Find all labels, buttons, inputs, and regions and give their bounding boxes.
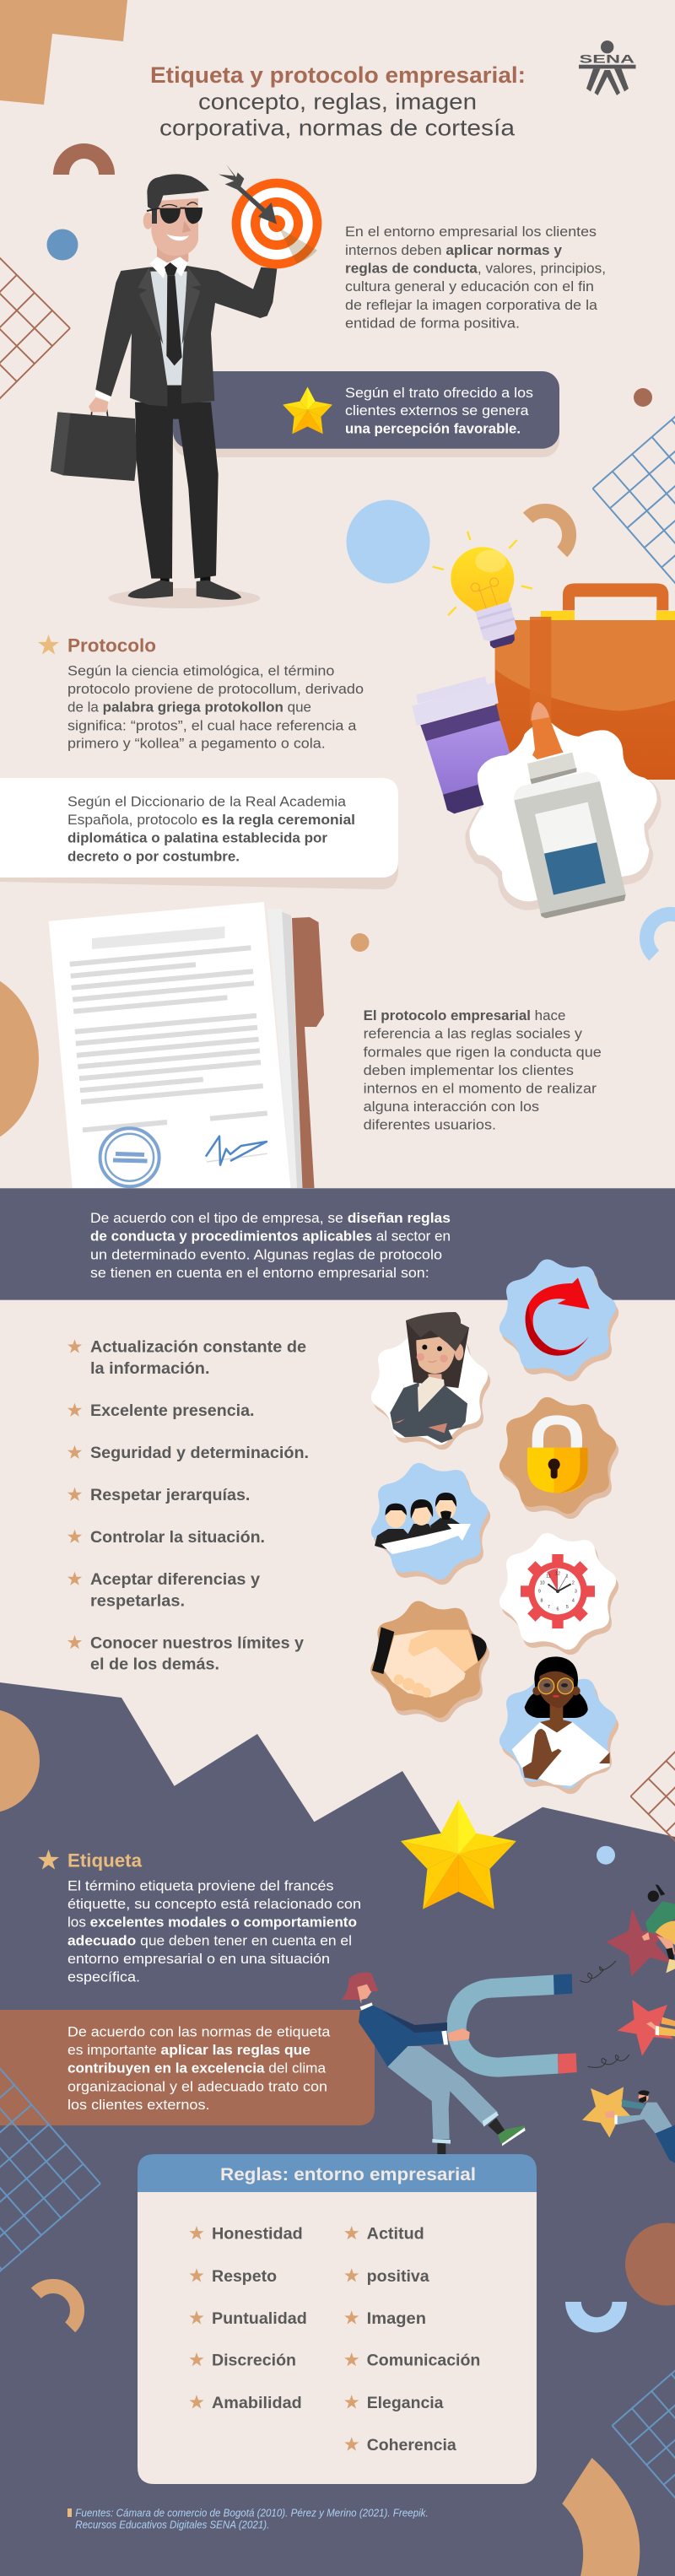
panel: dark band: se tienen en cuenta en el entorno empresarial son: xyxy=(90,1266,429,1281)
heading: Etiqueta xyxy=(38,1850,143,1871)
etiquette definition text: los excelentes modales o comportamiento xyxy=(68,1915,357,1931)
etiquette definition text: étiquette, su concepto está relacionado con xyxy=(68,1897,361,1912)
list of protocol rules: Aceptar diferencias y xyxy=(90,1570,260,1589)
icon: clock gear badge: 2 xyxy=(572,1581,575,1586)
decorative blue circle xyxy=(47,230,78,260)
title: concepto, reglas, imagen xyxy=(198,89,477,115)
icon: handshake badge xyxy=(359,1589,502,1735)
decorative tan circle xyxy=(0,1709,40,1813)
icon: clock gear badge: 12 xyxy=(555,1571,560,1576)
etiquette definition text: El término etiqueta proviene del francés xyxy=(68,1878,333,1893)
corporate protocol text: alguna interacción con los xyxy=(364,1099,539,1115)
panel: brown etiquette rules: De acuerdo con las normas de etiqueta xyxy=(68,2024,331,2039)
icon: clock gear badge: 11 xyxy=(546,1574,551,1579)
corporate protocol text: deben implementar los clientes xyxy=(364,1063,574,1078)
table body: Respeto xyxy=(212,2267,277,2286)
intro text: reglas de conducta , valores, principios, xyxy=(345,262,606,277)
intro text: cultura general y educación con el fin xyxy=(345,279,594,294)
corporate protocol text: referencia a las reglas sociales y xyxy=(364,1027,583,1042)
dark lower section background xyxy=(0,1682,675,2576)
panel: white RAE definition: diplomática o palatina establecida por xyxy=(68,831,328,846)
decorative tan arc lower left xyxy=(36,2286,78,2327)
illustration: businessman with target xyxy=(51,165,559,608)
decorative tan arc xyxy=(528,510,570,552)
icon: clock gear badge: 1 xyxy=(566,1574,569,1580)
icon: clock gear badge: 4 xyxy=(572,1599,575,1604)
intro text xyxy=(345,224,606,332)
sources footnote: Recursos Educativos Digitales SENA (2021). xyxy=(75,2519,269,2531)
illustration: light bulb, briefcase, cup and glue xyxy=(412,532,675,918)
icon: clock gear badge: 8 xyxy=(541,1599,543,1604)
decorative tan arc bottom right xyxy=(562,2458,640,2576)
decorative light blue dot xyxy=(597,1846,615,1865)
decorative brown grid right xyxy=(630,1690,675,1903)
panel: dark band xyxy=(0,1188,675,1300)
SENA logo: SENA xyxy=(579,53,634,66)
corporate protocol text: El protocolo empresarial hace xyxy=(364,1008,565,1023)
table body: Actitud xyxy=(367,2225,424,2244)
panel: white RAE definition: Española, protocolo es la regla ceremonial xyxy=(68,813,355,828)
list of protocol rules: Actualización constante de xyxy=(90,1338,306,1357)
panel: white RAE definition: Según el Diccionario de la Real Academia xyxy=(68,794,347,809)
heading: Protocolo: Protocolo xyxy=(68,635,156,656)
illustration: large gold star xyxy=(401,1800,516,1909)
table body: Puntualidad xyxy=(212,2309,307,2328)
protocol definition text: primero y “kollea” a pegamento o cola. xyxy=(68,737,326,752)
protocol definition text: de la palabra griega protokollon que xyxy=(68,700,311,716)
protocol definition text: protocolo proviene de protocollum, derivado xyxy=(68,682,364,697)
decorative light blue arc xyxy=(647,914,675,955)
icon: clock gear badge: 5 xyxy=(566,1605,569,1610)
illustration: signed document xyxy=(49,902,324,1188)
protocol definition text xyxy=(68,663,364,752)
icon: clock gear badge: 3 xyxy=(575,1590,577,1595)
SENA logo xyxy=(579,41,636,95)
sources footnote: Fuentes: Cámara de comercio de Bogotá (2010). Pérez y Merino (2021). Freepik. xyxy=(75,2507,429,2519)
intro text: internos deben aplicar normas y xyxy=(345,243,563,258)
decorative tan circle left xyxy=(0,970,39,1148)
decorative brown grid left xyxy=(0,222,70,435)
title xyxy=(150,62,526,141)
callout text: clientes externos se genera xyxy=(345,403,529,419)
table body: positiva xyxy=(367,2267,429,2286)
table body: Amabilidad xyxy=(212,2394,302,2412)
table header: Reglas: entorno empresarial xyxy=(220,2164,476,2184)
table body: Elegancia xyxy=(367,2394,444,2412)
title: Etiqueta y protocolo empresarial: xyxy=(150,62,526,88)
icon: clock gear badge: 10 xyxy=(540,1581,545,1586)
corporate protocol text: internos en el momento de realizar xyxy=(364,1082,597,1097)
list of protocol rules xyxy=(68,1338,309,1673)
panel: star callout behind figure xyxy=(173,371,559,457)
panel: white RAE definition xyxy=(0,778,398,889)
panel: dark band: de conducta y procedimientos aplicables al sector en xyxy=(90,1229,451,1245)
panel: rules table xyxy=(138,2154,537,2484)
intro text: En el entorno empresarial los clientes xyxy=(345,224,597,240)
decorative tan dot xyxy=(351,933,370,952)
panel: brown etiquette rules: organizacional y el adecuado trato con xyxy=(68,2079,327,2094)
protocol definition text: Según la ciencia etimológica, el término xyxy=(68,663,334,678)
decorative light blue circle xyxy=(346,500,430,584)
list of protocol rules: Seguridad y determinación. xyxy=(90,1444,309,1462)
list of protocol rules: respetarlas. xyxy=(90,1591,185,1610)
icon: padlock badge xyxy=(487,1385,631,1531)
icon: team badge xyxy=(359,1450,503,1597)
list of protocol rules: Respetar jerarquías. xyxy=(90,1486,250,1504)
icon: woman with glasses badge xyxy=(487,1656,631,1806)
table body: Comunicación xyxy=(367,2352,480,2370)
decorative brown circle right xyxy=(625,2222,675,2305)
corporate protocol text: formales que rigen la conducta que xyxy=(364,1045,602,1060)
table body xyxy=(138,2192,537,2484)
icon: clock gear badge: 6 xyxy=(557,1607,559,1612)
decorative brown dot xyxy=(634,388,652,407)
icon: clock gear badge xyxy=(487,1520,631,1667)
icon: clock gear badge: 7 xyxy=(548,1605,550,1610)
table body: Imagen xyxy=(367,2309,426,2328)
icon: gold star xyxy=(283,386,332,434)
etiquette definition text: entorno empresarial o en una situación xyxy=(68,1952,330,1967)
etiquette definition text: adecuado que deben tener en cuenta en el xyxy=(68,1933,352,1948)
panel: brown etiquette rules: los clientes externos. xyxy=(68,2098,210,2113)
etiquette definition text: específica. xyxy=(68,1970,140,1985)
panel: brown etiquette rules: es importante aplicar las reglas que xyxy=(68,2043,310,2058)
callout text xyxy=(345,386,533,437)
callout text: Según el trato ofrecido a los xyxy=(345,386,533,401)
panel: brown etiquette rules: contribuyen en la excelencia del clima xyxy=(68,2061,327,2076)
list of protocol rules: la información. xyxy=(90,1359,209,1378)
table body: Coherencia xyxy=(367,2436,456,2454)
list of protocol rules: el de los demás. xyxy=(90,1655,219,1673)
list of protocol rules: Controlar la situación. xyxy=(90,1528,265,1547)
panel: dark band: un determinado evento. Algunas reglas de protocolo xyxy=(90,1247,442,1262)
decorative blue grid right xyxy=(592,386,675,607)
heading: Etiqueta: Etiqueta xyxy=(68,1850,143,1871)
etiquette definition text xyxy=(68,1878,361,1985)
list of protocol rules: Conocer nuestros límites y xyxy=(90,1634,304,1652)
decorative tan corner shape xyxy=(0,0,127,105)
table body: Discreción xyxy=(212,2352,296,2370)
icon: businesswoman badge xyxy=(359,1312,503,1462)
callout text: una percepción favorable. xyxy=(345,422,521,437)
intro text: de reflejar la imagen corporativa de la xyxy=(345,298,598,313)
panel: dark band: De acuerdo con el tipo de empresa, se diseñan reglas xyxy=(90,1211,451,1226)
table header xyxy=(138,2154,537,2192)
protocol definition text: significa: “protos”, el cual hace referencia a xyxy=(68,718,357,733)
list of protocol rules: Excelente presencia. xyxy=(90,1401,255,1420)
decorative brown half ring xyxy=(53,143,115,175)
icon: clock gear badge: 9 xyxy=(538,1590,541,1595)
title: corporativa, normas de cortesía xyxy=(159,116,515,141)
corporate protocol text: diferentes usuarios. xyxy=(364,1118,496,1133)
intro text: entidad de forma positiva. xyxy=(345,316,520,332)
panel: brown etiquette rules xyxy=(0,2010,375,2125)
corporate protocol text xyxy=(364,1008,602,1133)
icon: refresh arrow badge xyxy=(487,1247,631,1394)
illustration: person pulling stars with magnet xyxy=(342,1884,675,2163)
decorative blue grid lower right xyxy=(613,2322,675,2544)
decorative blue grid lower left xyxy=(0,2066,100,2287)
panel: white RAE definition: decreto o por costumbre. xyxy=(68,849,240,864)
sources footnote xyxy=(68,2507,429,2531)
decorative light blue half ring xyxy=(565,2302,627,2332)
table body: Honestidad xyxy=(212,2225,303,2244)
